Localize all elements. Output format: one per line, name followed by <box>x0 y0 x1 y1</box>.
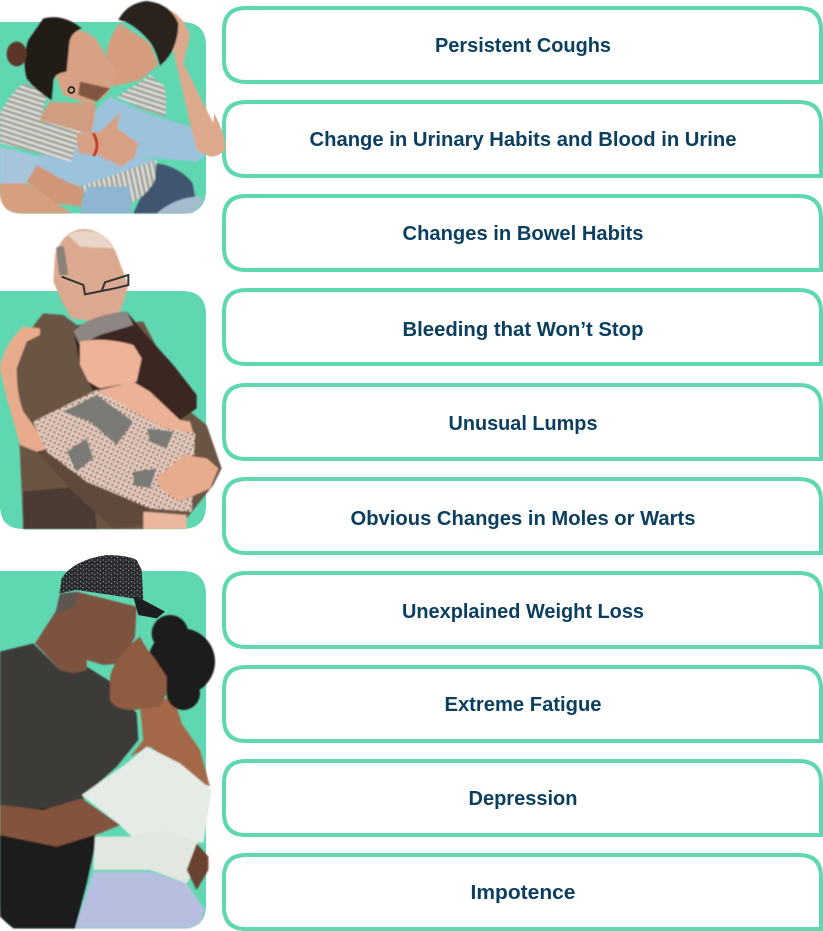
card: Depression: Depression <box>468 788 578 810</box>
card: Change in Urinary Habits and Blood in Urine <box>224 102 821 176</box>
baseball cap <box>59 555 143 600</box>
card: Persistent Coughs: Persistent Coughs <box>435 35 611 57</box>
green backdrop 2 <box>0 291 206 529</box>
photo panel: embracing couple with striped sleeves <box>0 1 225 213</box>
card: Obvious Changes in Moles or Warts <box>224 479 821 553</box>
card: Unusual Lumps: Unusual Lumps <box>448 413 598 435</box>
card: Persistent Coughs <box>224 8 821 82</box>
card: Changes in Bowel Habits: Changes in Bowel Habits <box>402 223 644 245</box>
person: couple 3 figures <box>0 592 215 928</box>
photo panel: older couple hugging <box>0 229 222 529</box>
green backdrop 1 <box>0 22 206 213</box>
card: Depression <box>224 761 821 835</box>
card: Unusual Lumps <box>224 385 821 459</box>
card: Impotence <box>224 855 821 929</box>
elbow overlapping card 2 <box>212 113 225 156</box>
person: couple 1 figures <box>0 1 225 213</box>
card: Obvious Changes in Moles or Warts: Obvious Changes in Moles or Warts <box>350 508 696 530</box>
card: Extreme Fatigue <box>224 667 821 741</box>
card: Bleeding that Won't Stop: Bleeding that Won’t Stop <box>402 319 644 341</box>
card: Unexplained Weight Loss: Unexplained Weight Loss <box>402 601 644 623</box>
person: couple 2 figures <box>0 229 222 529</box>
card: Extreme Fatigue: Extreme Fatigue <box>444 694 602 716</box>
card: Change in Urinary Habits and Blood in Urine: Change in Urinary Habits and Blood in Urine <box>310 129 736 151</box>
card: Changes in Bowel Habits <box>224 196 821 270</box>
card: Unexplained Weight Loss <box>224 573 821 647</box>
photo panel: couple with cap kissing forehead <box>0 555 215 928</box>
green backdrop 3 <box>0 571 206 928</box>
glasses <box>62 275 128 294</box>
card: Bleeding that Won't Stop <box>224 290 821 364</box>
card: Impotence: Impotence <box>470 882 576 904</box>
